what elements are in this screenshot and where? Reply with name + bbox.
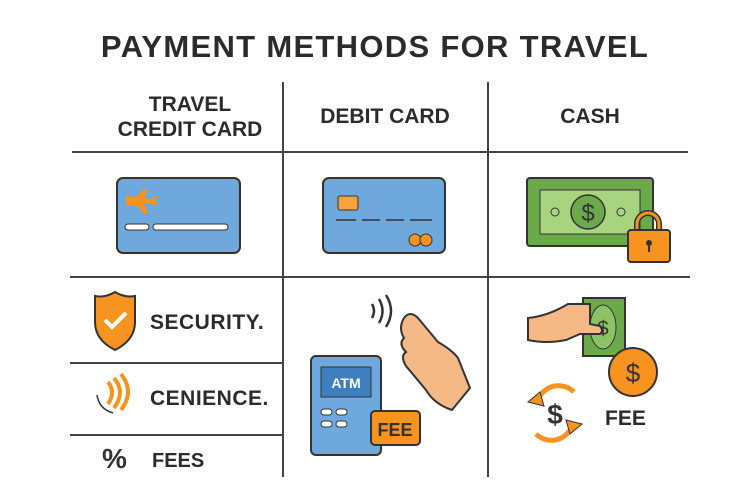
- text: security: SECURITY.: [150, 311, 264, 334]
- icon: ATM: [311, 356, 420, 455]
- icon: cash bill with lock: [527, 178, 670, 262]
- icon: cash bill with lock: $: [581, 200, 595, 227]
- icon: ATM: ATM: [331, 375, 361, 391]
- header: debit card: DEBIT CARD: [320, 105, 450, 128]
- icon: hand giving cash: $: [626, 358, 641, 388]
- text: cash fee: FEE: [605, 407, 646, 430]
- icon: hand giving cash: $: [597, 318, 609, 340]
- icon: hand giving cash: [528, 298, 657, 396]
- text: fees: FEES: [152, 450, 204, 472]
- text: convenience: CENIENCE.: [150, 387, 269, 410]
- icon: credit card: [117, 178, 240, 253]
- icon: percent: %: [102, 443, 127, 474]
- title: PAYMENT METHODS FOR TRAVEL: [101, 29, 649, 64]
- header: cash: CASH: [560, 105, 620, 128]
- icon: contactless waves: [372, 295, 391, 327]
- header: travel credit card: CREDIT CARD: [118, 118, 262, 141]
- icon: currency exchange cycle: $: [547, 399, 563, 430]
- icon: hand: [401, 314, 470, 410]
- icon: currency exchange cycle: [528, 386, 582, 440]
- icon: debit card: [323, 178, 445, 253]
- icon: shield: [95, 292, 135, 350]
- header: travel credit card: TRAVEL: [149, 93, 231, 116]
- icon: contactless: [97, 374, 128, 413]
- header: travel credit card: [118, 93, 262, 141]
- icon: ATM: FEE: [377, 420, 413, 440]
